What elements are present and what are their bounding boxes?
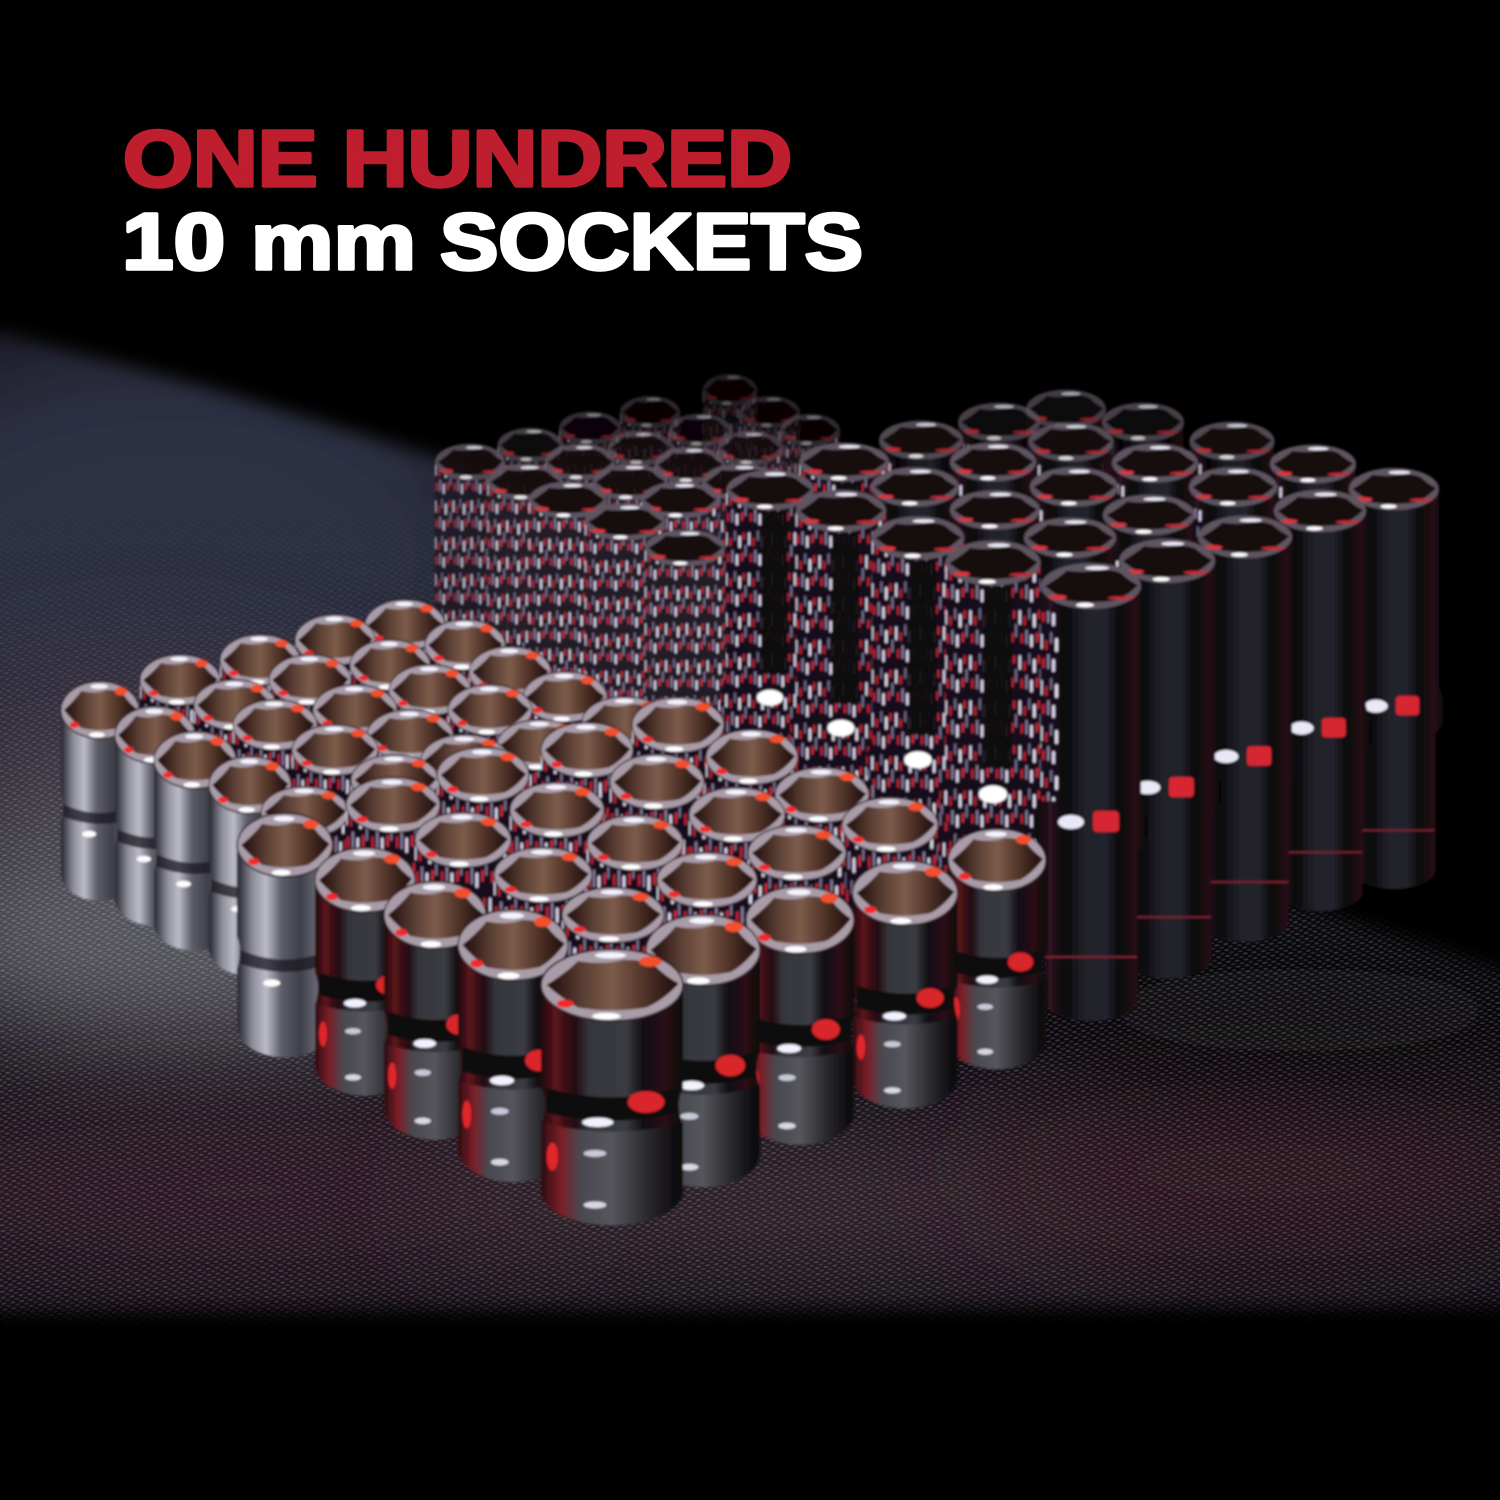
heading line: one hundred: ONE HUNDRED	[123, 114, 792, 203]
deep sockets: rear-left block	[435, 374, 840, 868]
photo infographic canvas	[0, 128, 1500, 1321]
front deep socket	[1035, 563, 1147, 1021]
short sockets: front block	[238, 697, 1046, 1225]
textured floor mat	[0, 300, 1500, 1330]
heading line: 10 mm: 10 mm	[122, 197, 416, 286]
front short socket	[541, 949, 683, 1225]
heading line: sockets: SOCKETS	[440, 197, 863, 286]
short sockets: left block	[61, 600, 668, 981]
deep sockets: right block	[721, 389, 1444, 1021]
title	[122, 114, 863, 286]
